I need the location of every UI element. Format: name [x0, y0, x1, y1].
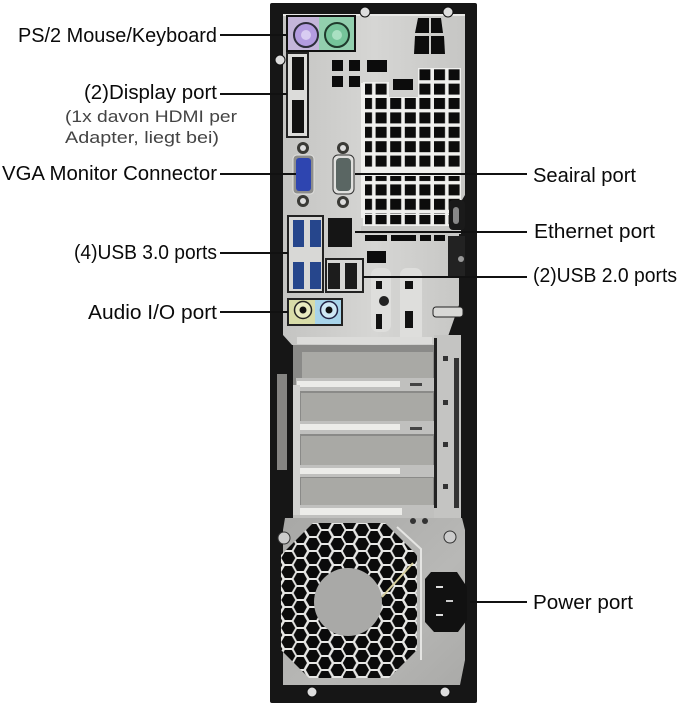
serial port	[333, 142, 354, 208]
audio ports	[287, 298, 343, 326]
ventilation grid	[332, 60, 461, 263]
PS/2 ports	[286, 15, 356, 52]
keyhole recess	[448, 236, 465, 276]
note: HDMI adapter: (1x davon HDMI per	[65, 107, 237, 126]
screws	[275, 7, 456, 697]
label: USB 2.0 ports: (2)USB 2.0 ports	[533, 265, 677, 287]
note: HDMI adapter	[65, 107, 237, 147]
label: PS/2 Mouse/Keyboard: PS/2 Mouse/Keyboard	[18, 25, 217, 47]
VGA port	[293, 142, 314, 207]
label: Power port: Power port	[533, 592, 633, 614]
upper silver panel	[283, 14, 465, 345]
label: USB 3.0 ports: (4)USB 3.0 ports	[74, 242, 217, 264]
label: Audio I/O port: Audio I/O port	[88, 302, 217, 324]
label: Ethernet port: Ethernet port	[534, 221, 655, 243]
power socket	[425, 572, 467, 632]
USB 3.0 ports	[288, 216, 323, 292]
barcode label	[277, 374, 287, 470]
fan grille	[281, 523, 417, 678]
leader lines	[220, 35, 527, 602]
latch	[433, 307, 463, 317]
label: VGA Monitor Connector: VGA Monitor Connector	[2, 163, 217, 185]
power supply plate	[281, 518, 467, 685]
DisplayPort ports	[287, 53, 308, 137]
expansion area	[293, 335, 461, 520]
USB 2.0 ports	[326, 259, 363, 292]
note: HDMI adapter: Adapter, liegt bei)	[65, 128, 219, 147]
Ethernet port	[328, 218, 352, 247]
lock slot	[449, 200, 465, 230]
label: Serial port: Seairal port	[533, 165, 636, 187]
label: Display port: (2)Display port	[84, 82, 217, 104]
black chassis	[270, 3, 477, 703]
logo cutout	[414, 18, 445, 54]
stamped slots	[371, 268, 422, 343]
computer case rear	[270, 3, 477, 703]
